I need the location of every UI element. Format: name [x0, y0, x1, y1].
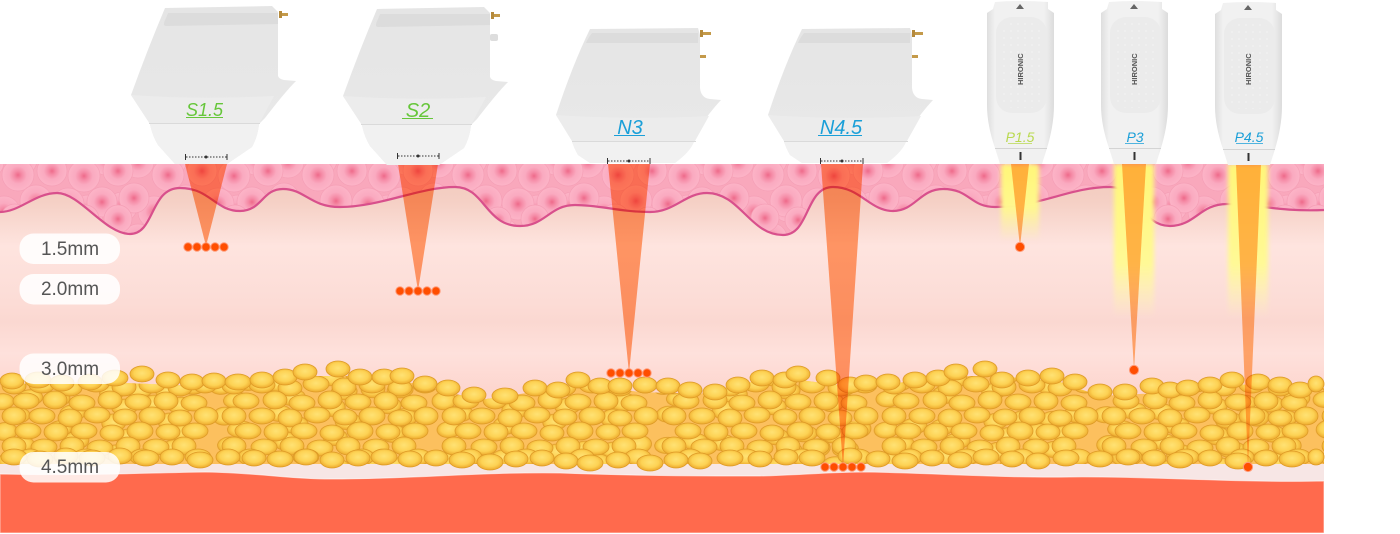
depth label: 2.0mm [20, 274, 120, 304]
pen cartridge: P1.5: HIRONIC [1016, 53, 1025, 85]
beam: S1.5 [185, 164, 227, 246]
focal point: P1.5 [1015, 242, 1025, 252]
fat layer [0, 361, 1324, 468]
depth label: 1.5mm [20, 234, 120, 264]
focal point: P4.5 [1243, 462, 1253, 472]
pen cartridge: P1.5 [987, 1, 1054, 164]
cartridge: N3 [556, 28, 721, 164]
depth label: 4.5mm: 4.5mm [41, 457, 99, 478]
yellow glow: P3 [1114, 164, 1154, 316]
pen cartridge: P1.5: P1.5 [1006, 129, 1035, 145]
muscle layer [0, 472, 1324, 533]
epidermis cells [0, 164, 1324, 236]
pen cartridge: P4.5: P4.5 [1235, 129, 1264, 145]
cartridge: S2 [343, 7, 508, 165]
cartridge: S1.5: S1.5 [186, 100, 224, 120]
beam: S2 [398, 164, 438, 291]
cartridge: N4.5 [768, 28, 933, 164]
cartridge: N4.5: N4.5 [820, 117, 863, 139]
depth label: 3.0mm [20, 354, 120, 384]
fat cells lower edge [1, 448, 1324, 471]
pen cartridge: P3 [1101, 1, 1168, 164]
cartridge: N3: N3 [617, 117, 643, 139]
beam: P1.5 [1011, 164, 1029, 247]
beam: P4.5 [1236, 164, 1261, 467]
dermis layer [0, 164, 1324, 484]
focal points: S1.5 [184, 243, 228, 251]
depth label: 4.5mm [20, 452, 120, 482]
cartridge: S1.5 [131, 6, 296, 164]
focal point: P3 [1129, 365, 1139, 375]
pen cartridge: P4.5 [1215, 2, 1282, 165]
focal points: N3 [607, 369, 651, 377]
beam: N4.5 [821, 164, 863, 467]
pale fascia band [0, 464, 1324, 486]
pen cartridge: P4.5: HIRONIC [1244, 53, 1253, 85]
basal wave line [0, 187, 1324, 235]
depth label: 3.0mm: 3.0mm [41, 359, 99, 380]
pen cartridge: P3: HIRONIC [1130, 53, 1139, 85]
pen cartridge: P3: P3 [1126, 129, 1144, 145]
yellow glow: P1.5 [1001, 164, 1039, 240]
depth label: 1.5mm: 1.5mm [41, 239, 99, 260]
depth label: 2.0mm: 2.0mm [41, 279, 99, 300]
focal points: S2 [396, 287, 440, 295]
focal points: N4.5 [821, 463, 865, 471]
beam: P3 [1122, 164, 1146, 370]
beam: N3 [608, 164, 650, 373]
yellow glow: P4.5 [1228, 164, 1268, 340]
cartridge: S2: S2 [406, 100, 430, 122]
